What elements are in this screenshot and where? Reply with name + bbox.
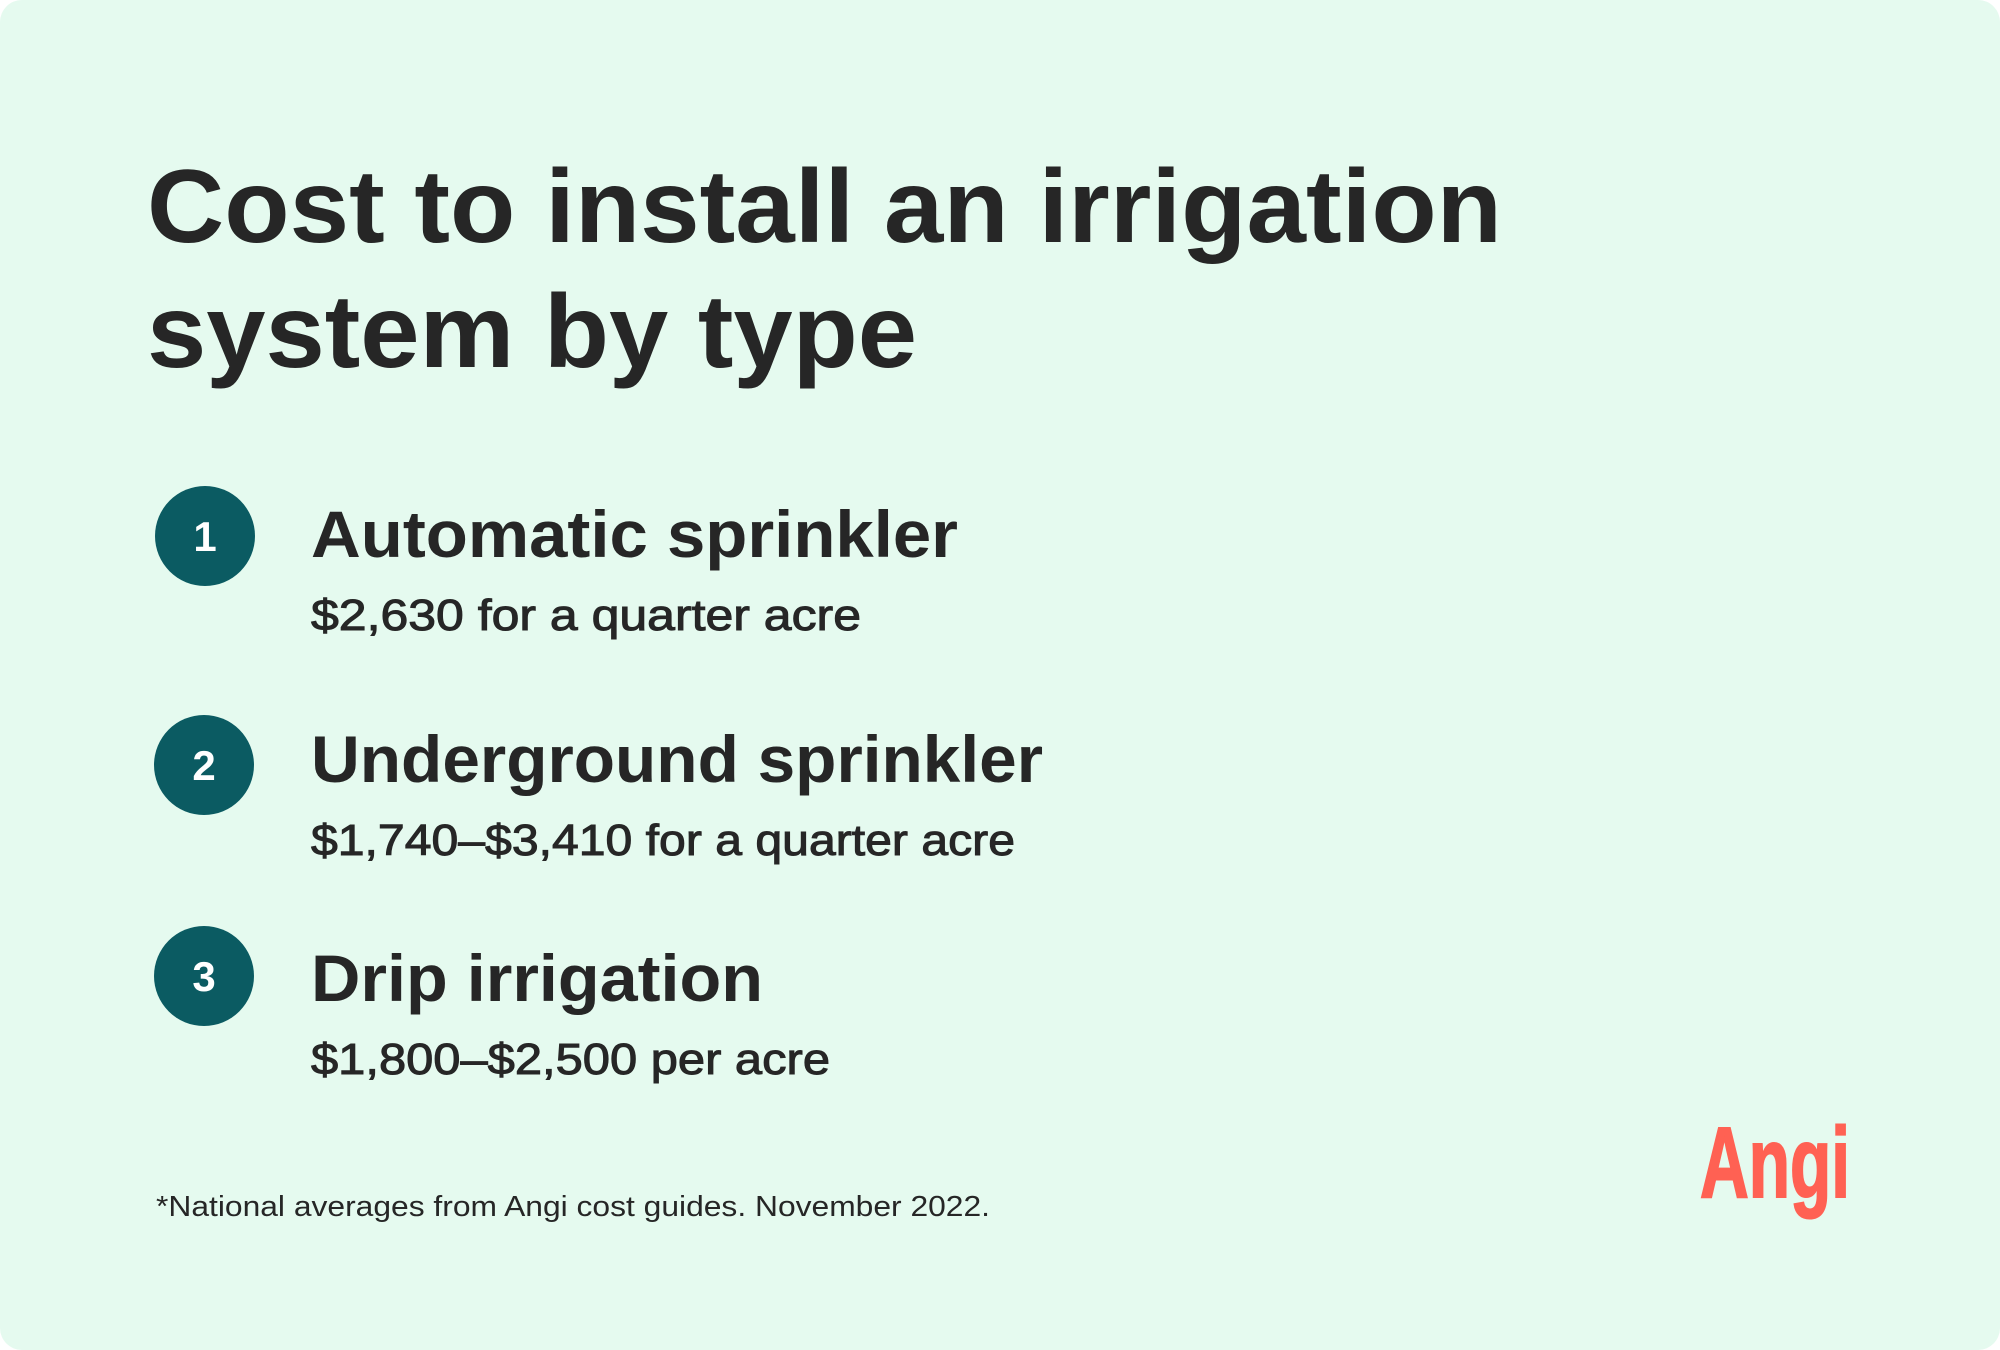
heading 1: Automatic sprinkler — [311, 497, 958, 571]
title: Cost to install an irrigation — [147, 149, 1502, 265]
icon: number 1 circle — [155, 486, 255, 586]
icon: number 1 circle: 1 — [193, 513, 217, 560]
logo: Angi: Angi — [1700, 1107, 1850, 1219]
cost 1: $2,630 for a quarter acre — [311, 591, 861, 640]
item 3: drip irrigation — [154, 926, 830, 1084]
title: system by type — [147, 274, 917, 390]
heading 3: Drip irrigation — [311, 941, 763, 1015]
item 1: automatic sprinkler — [155, 486, 958, 640]
icon: number 2 circle: 2 — [192, 742, 216, 789]
cost 2: $1,740–$3,410 for a quarter acre — [311, 816, 1015, 865]
heading 2: Underground sprinkler — [311, 722, 1043, 796]
cost 3: $1,800–$2,500 per acre — [311, 1035, 830, 1084]
icon: number 3 circle: 3 — [192, 953, 216, 1000]
footnote: *National averages from Angi cost guides. November 2022. — [156, 1191, 990, 1223]
title — [147, 149, 1502, 390]
item 2: underground sprinkler — [154, 715, 1043, 865]
icon: number 3 circle — [154, 926, 254, 1026]
icon: number 2 circle — [154, 715, 254, 815]
